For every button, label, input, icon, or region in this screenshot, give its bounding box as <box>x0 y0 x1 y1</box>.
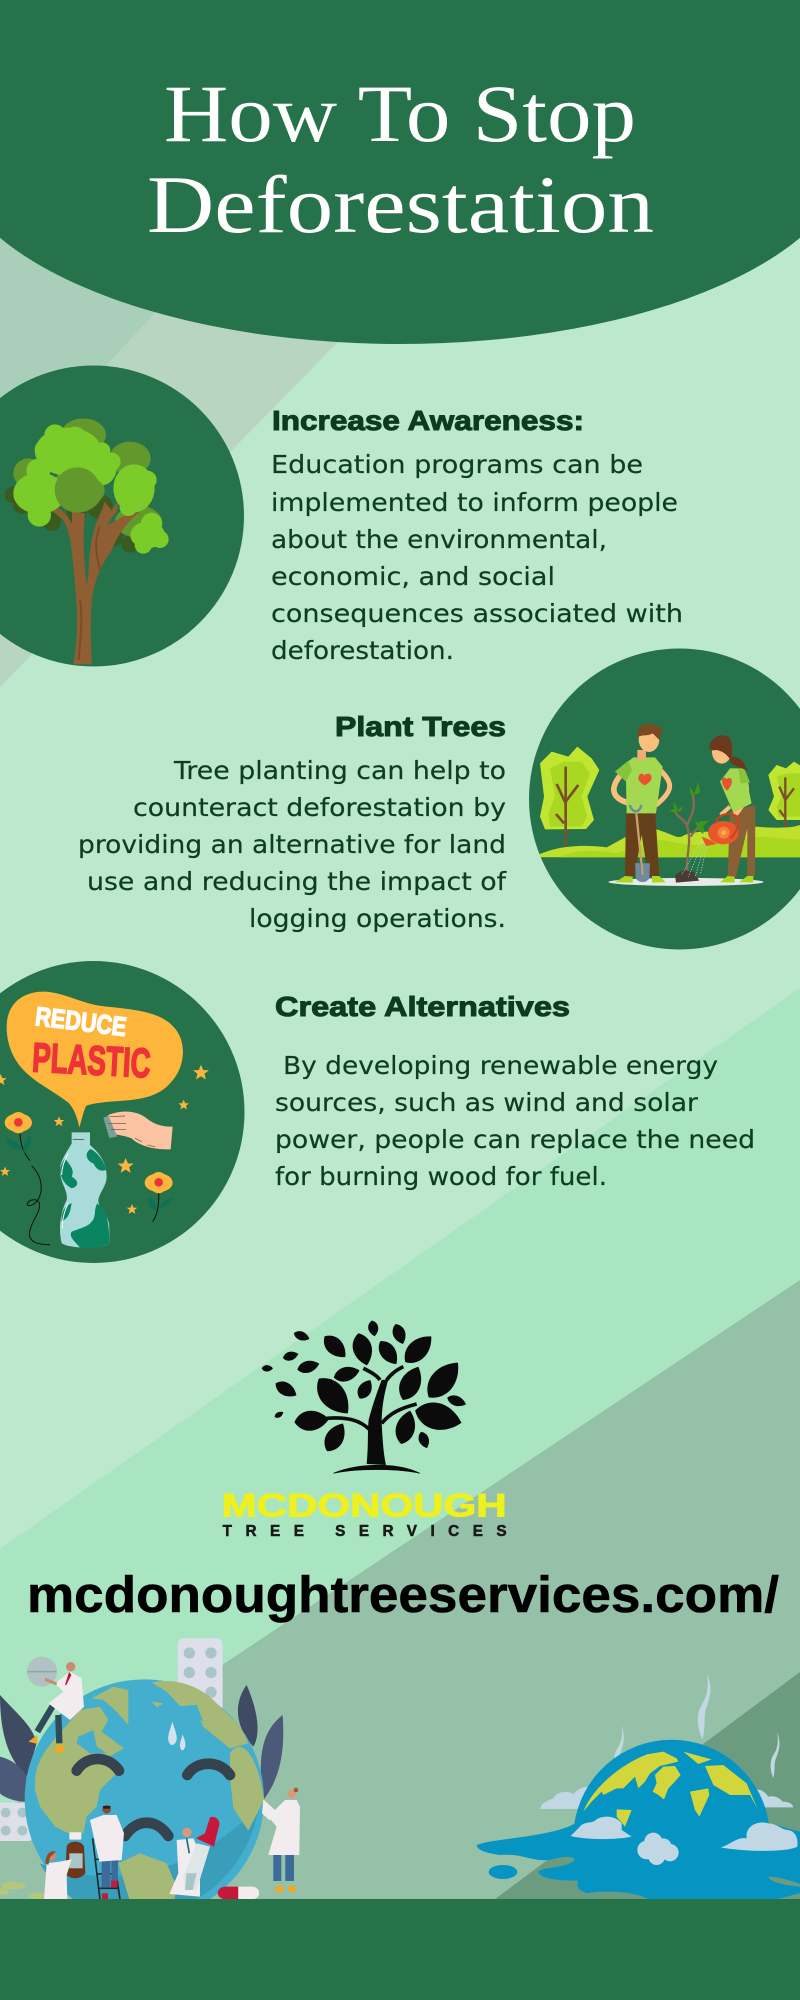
text block: providing an alternative for land <box>78 830 506 859</box>
globe <box>574 1740 769 1827</box>
back leaves <box>0 1685 283 1802</box>
man <box>614 724 670 883</box>
text block <box>275 1051 755 1191</box>
title <box>147 68 654 250</box>
pill packs <box>0 1638 223 1899</box>
circle: tree <box>0 366 244 666</box>
text block: for burning wood for fuel. <box>275 1162 607 1191</box>
back clouds <box>541 1787 793 1809</box>
section: plant trees <box>78 711 507 933</box>
section: create alternatives <box>275 991 755 1191</box>
circle: reduce plastic <box>0 961 244 1263</box>
doctor with dropper <box>169 1817 219 1897</box>
text block: economic, and social <box>271 562 555 591</box>
flowers <box>5 1112 174 1245</box>
text block: power, people can replace the need <box>275 1125 755 1154</box>
text block: consequences associated with <box>271 599 683 628</box>
pill capsule <box>218 1887 259 1899</box>
logo wordmark: TREE SERVICES <box>223 1523 507 1540</box>
text block: use and reducing the impact of <box>87 867 507 896</box>
title: How To Stop <box>164 68 636 159</box>
text block <box>271 450 683 665</box>
logo wordmark: MCDONOUGH <box>222 1487 507 1524</box>
title: Deforestation <box>147 159 654 250</box>
speech bubble: PLASTIC <box>31 1034 152 1087</box>
text block: counteract deforestation by <box>133 793 506 822</box>
website url: mcdonoughtreeservices.com/ <box>27 1566 779 1623</box>
heading: Create Alternatives <box>275 991 570 1022</box>
water <box>682 840 707 877</box>
icon: people planting tree <box>533 724 800 886</box>
continents <box>583 1752 757 1827</box>
icon: tree <box>5 418 169 664</box>
sapling <box>669 782 709 883</box>
icon: logo tree <box>262 1320 468 1473</box>
puddle <box>477 1823 800 1899</box>
heading: Plant Trees <box>335 711 506 742</box>
woman <box>702 735 755 883</box>
illustration: sad earth with doctors <box>0 1638 300 1919</box>
heading: Increase Awareness: <box>272 405 584 436</box>
logo wordmark <box>222 1487 507 1540</box>
footer bar <box>0 1899 800 2000</box>
doctor with ladder <box>90 1805 124 1899</box>
left tree <box>540 747 599 846</box>
text block: sources, such as wind and solar <box>275 1088 699 1117</box>
speech bubble: REDUCE <box>34 1001 128 1042</box>
text block: deforestation. <box>271 636 454 665</box>
header panel <box>0 0 800 344</box>
circle: people planting <box>529 648 800 950</box>
text block: Education programs can be <box>271 450 643 479</box>
text block <box>78 756 507 933</box>
text block: about the environmental, <box>271 525 607 554</box>
section: increase awareness <box>271 405 683 665</box>
logo <box>222 1320 507 1540</box>
hand <box>103 1112 173 1149</box>
doctor with bottle <box>44 1832 85 1900</box>
bottle <box>60 1132 109 1248</box>
right tree <box>768 762 800 828</box>
steam <box>614 1674 779 1778</box>
doctor on top <box>27 1657 84 1752</box>
text block: logging operations. <box>249 904 506 933</box>
illustration: melting earth <box>477 1674 800 1899</box>
earth <box>25 1679 264 1919</box>
front clouds <box>571 1817 798 1865</box>
icon: reduce plastic bottle <box>0 992 209 1248</box>
doctor with clipboard <box>262 1788 300 1892</box>
text block: implemented to inform people <box>271 488 678 517</box>
text block: By developing renewable energy <box>283 1051 718 1080</box>
text block: Tree planting can help to <box>173 756 506 785</box>
speech bubble <box>7 992 183 1127</box>
